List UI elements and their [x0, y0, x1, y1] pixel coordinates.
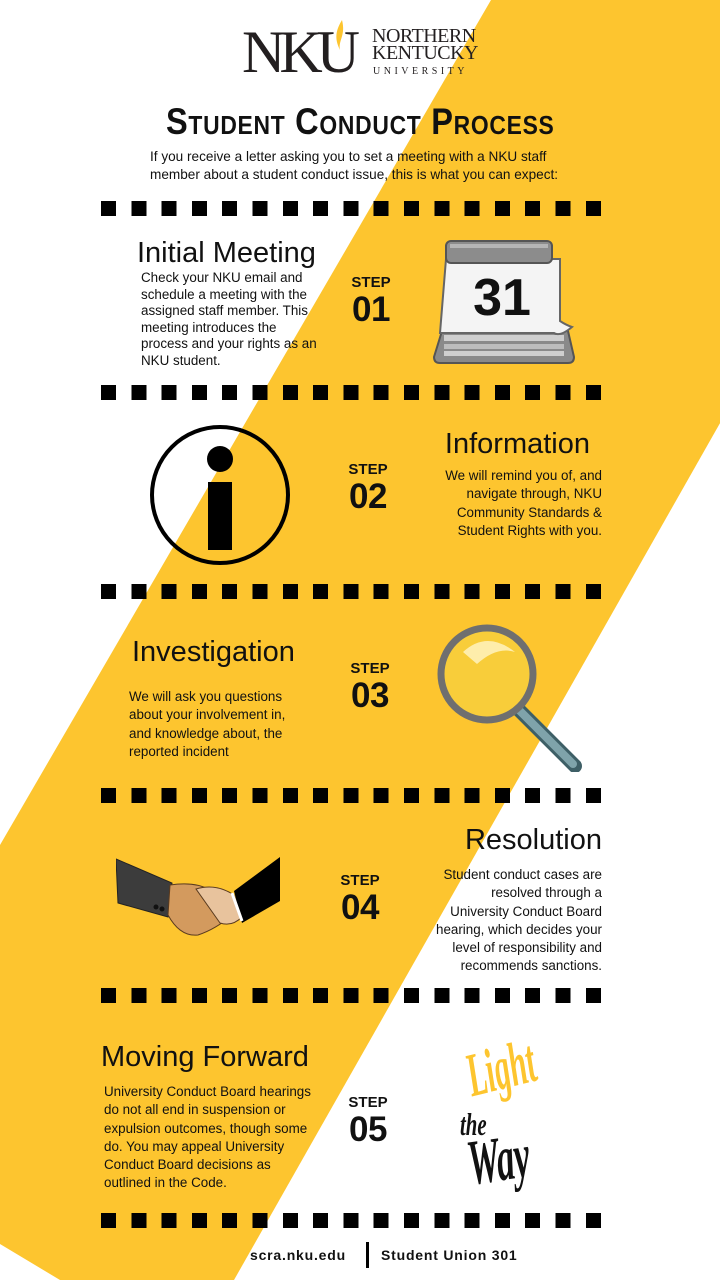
heading: Initial Meeting: Initial Meeting [137, 237, 316, 269]
intro text: If you receive a letter asking you to set a meeting with a NKU staff [150, 149, 546, 164]
title: Student Conduct Process [166, 101, 555, 142]
logo: Light the Way: the [460, 1106, 487, 1142]
step 3 panel [129, 624, 582, 772]
step label 05: STEP [348, 1094, 388, 1111]
body text step 1: meeting introduces the [141, 320, 276, 335]
footer: Student Union 301 [381, 1247, 518, 1263]
body text step 5: University Conduct Board hearings [104, 1084, 311, 1099]
step label 03 [350, 660, 390, 715]
body text step 1: NKU student. [141, 353, 221, 368]
body text step 2 [445, 468, 602, 538]
body text step 4: recommends sanctions. [461, 958, 602, 973]
step label 03: STEP [350, 660, 390, 677]
icon: magnifying glass [438, 624, 582, 772]
body text step 3 [129, 689, 285, 759]
body text step 4 [436, 867, 602, 973]
body text step 2: Community Standards & [457, 505, 602, 520]
heading: Moving Forward: Moving Forward [101, 1041, 309, 1073]
icon: flame [336, 20, 344, 50]
body text step 2: navigate through, NKU [467, 486, 602, 501]
logo: UNIVERSITY [373, 66, 468, 77]
icon: handshake [116, 857, 280, 936]
body text step 5: do not all end in suspension or [104, 1102, 286, 1117]
step label 04: 04 [341, 888, 379, 927]
step 4 panel [116, 824, 602, 973]
body text step 3: and knowledge about, the [129, 726, 282, 741]
intro text: member about a student conduct issue, this is what you can expect: [150, 167, 558, 182]
step label 05 [348, 1094, 388, 1149]
body text step 1 [141, 270, 317, 368]
logo wordmark: KENTUCKY [372, 42, 478, 64]
body text step 4: University Conduct Board [450, 904, 602, 919]
step label 01: STEP [351, 274, 391, 291]
logo wordmark [372, 25, 478, 64]
body text step 5: do. You may appeal University [104, 1139, 284, 1154]
body text step 1: assigned staff member. This [141, 303, 308, 318]
body text step 4: level of responsibility and [452, 940, 602, 955]
step label 01: 01 [352, 290, 390, 329]
step label 01 [351, 274, 391, 329]
step label 04 [340, 872, 380, 927]
body text step 3: We will ask you questions [129, 689, 282, 704]
body text step 5: Conduct Board decisions as [104, 1157, 271, 1172]
step 2 panel [150, 425, 602, 565]
step label 04: STEP [340, 872, 380, 889]
icon: information [150, 425, 290, 565]
body text step 4: resolved through a [491, 885, 602, 900]
body text step 3: reported incident [129, 744, 229, 759]
body text step 2: Student Rights with you. [458, 523, 602, 538]
body text step 4: hearing, which decides your [436, 922, 602, 937]
body text step 1: process and your rights as an [141, 336, 317, 351]
icon: calendar [433, 240, 575, 364]
logo: Light the Way: Light [459, 1027, 542, 1110]
intro text [150, 149, 558, 182]
step 1 panel [137, 237, 575, 368]
step 5 panel [101, 1027, 542, 1198]
icon: calendar: 31 [473, 269, 531, 327]
body text step 1: Check your NKU email and [141, 270, 302, 285]
body text step 4: Student conduct cases are [443, 867, 602, 882]
logo [242, 19, 478, 85]
heading: Information: Information [445, 428, 590, 460]
heading: Investigation: Investigation [132, 636, 295, 668]
step label 03: 03 [351, 676, 389, 715]
step label 02 [348, 461, 388, 516]
body text step 5: outlined in the Code. [104, 1175, 227, 1190]
logo mark NKU: NKU [242, 19, 354, 85]
logo wordmark: NORTHERN [372, 25, 476, 47]
step label 02: 02 [349, 477, 387, 516]
body text step 5 [104, 1084, 311, 1190]
body text step 5: expulsion outcomes, though some [104, 1121, 307, 1136]
footer: scra.nku.edu [250, 1247, 346, 1263]
step label 02: STEP [348, 461, 388, 478]
step label 05: 05 [349, 1110, 387, 1149]
logo: Light the Way: Way [463, 1119, 534, 1198]
body text step 2: We will remind you of, and [445, 468, 602, 483]
heading: Resolution: Resolution [465, 824, 602, 856]
body text step 3: about your involvement in, [129, 707, 285, 722]
logo: Light the Way [459, 1027, 542, 1198]
body text step 1: schedule a meeting with the [141, 287, 307, 302]
footer [250, 1242, 518, 1268]
